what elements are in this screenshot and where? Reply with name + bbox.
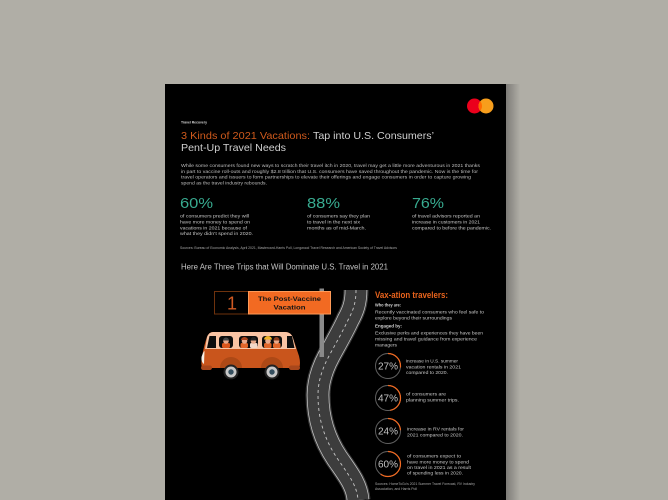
engaged by: Exclusive perks and experiences they have been — [375, 331, 483, 337]
donut stat: 24%: 2021 compared to 2020. — [407, 433, 463, 439]
title: 3 Kinds of 2021 Vacations: — [181, 130, 310, 142]
stat: 76% — [412, 196, 491, 231]
stat: 76%: 76% — [412, 196, 444, 212]
stat: 88%: to travel in the next six — [307, 220, 361, 226]
who they are: Who they are: — [375, 303, 401, 309]
stat: 76%: increase in customers in 2021 — [412, 220, 480, 226]
road — [318, 290, 358, 500]
donut stat: 27%: 27% — [378, 362, 398, 373]
engaged by: Engaged by: — [375, 324, 402, 330]
sources note: trip one — [375, 482, 475, 491]
donut stat: 27%: compared to 2020. — [406, 370, 448, 376]
intro paragraph: spend as the travel industry rebounds. — [181, 180, 267, 186]
donut stat: 47%: 47% — [378, 394, 398, 405]
section heading: Here Are Three Trips that Will Dominate U.S. Travel in 2021 — [181, 262, 389, 272]
wheels — [224, 364, 280, 380]
panel: black document page — [165, 84, 506, 500]
engaged by: managers — [375, 343, 398, 349]
stat: 60%: 60% — [180, 196, 213, 212]
stat: 60% — [180, 196, 253, 237]
stat: 76%: of travel advisors reported an — [412, 214, 480, 220]
donut stat: 24%: increase in RV rentals for — [407, 427, 464, 433]
donut stat: 60% — [376, 452, 472, 477]
sign: The Post-Vaccine Vacation: Vacation — [274, 304, 306, 312]
intro paragraph: travel operators and issuers to form partnerships to elevate their offerings and engage consumers in order to capture growing — [181, 175, 471, 181]
donut stat: 60%: of spending less in 2020. — [407, 471, 463, 477]
stat: 88% — [307, 196, 370, 231]
donut stat: 24% — [376, 418, 464, 444]
engaged by — [375, 324, 483, 349]
passengers — [222, 336, 280, 348]
donut stat: 47%: of consumers are — [406, 392, 446, 398]
sources note: Sources: Bureau of Economic Analysis, April 2021, Mastercard-Harris Poll, Longwood Travel Research and American Society of Travel Advisors — [180, 246, 397, 250]
stat: 60%: vacations in 2021 because of — [180, 225, 248, 231]
donut stat: 60%: of consumers expect to — [407, 454, 461, 460]
sign: The Post-Vaccine Vacation: The Post-Vaccine — [258, 296, 321, 303]
intro paragraph: in part to vaccine roll-outs and roughly $2.8 trillion that U.S. consumers have saved throughout the pandemic. Now is the time for — [181, 169, 478, 175]
donut stat: 60%: have more money to spend — [407, 460, 469, 466]
donut stat: 27%: increase in U.S. summer — [406, 359, 458, 365]
sign: The Post-Vaccine Vacation — [248, 292, 330, 314]
intro paragraph: While some consumers found new ways to scratch their travel itch in 2020, travel may get a little more adventurous in 2021 thanks — [181, 163, 481, 169]
intro paragraph — [181, 163, 481, 186]
sign: number 1: 1 — [227, 294, 237, 314]
stat: 88%: 88% — [307, 196, 340, 212]
donut stat: 60%: 60% — [378, 460, 398, 471]
title: Tap into U.S. Consumers’ — [313, 130, 434, 142]
stat: 88%: of consumers say they plan — [307, 214, 370, 220]
donut stat: 27% — [376, 354, 461, 378]
traveler heading: Vax-ation travelers: — [375, 290, 448, 300]
icon: orange bus with passengers — [201, 332, 300, 380]
stat: 88%: months as of mid-March. — [307, 225, 366, 231]
engaged by: missing and travel guidance from experience — [375, 337, 477, 343]
title: Pent-Up Travel Needs — [181, 142, 286, 154]
title — [181, 130, 434, 154]
donut stat: 47% — [376, 386, 459, 410]
who they are — [375, 303, 484, 322]
eyebrow label: Travel Recovery — [181, 120, 208, 124]
who they are: explore beyond their surroundings — [375, 316, 453, 322]
donut stat: 47%: planning summer trips. — [406, 398, 459, 404]
sign pole — [320, 288, 324, 357]
stat: 60%: of consumers predict they will — [180, 214, 249, 220]
stat: 60%: have more money to spend on — [180, 220, 250, 226]
sign: number 1 — [214, 292, 248, 314]
donut stat: 24%: 24% — [378, 427, 398, 438]
who they are: Recently vaccinated consumers who feel safe to — [375, 310, 484, 316]
sources note: trip one: Association, and Harris Poll — [375, 487, 417, 491]
stat: 76%: compared to before the pandemic. — [412, 225, 491, 231]
sources note: trip one: Sources: HomeToGo's 2021 Summer Travel Forecast, RV Industry — [375, 482, 475, 486]
donut stat: 27%: vacation rentals in 2021 — [406, 365, 461, 371]
donut stat: 60%: on travel in 2021 as a result — [407, 465, 472, 471]
stat: 60%: what they didn’t spend in 2020. — [180, 231, 253, 237]
logo: Mastercard — [467, 98, 494, 114]
